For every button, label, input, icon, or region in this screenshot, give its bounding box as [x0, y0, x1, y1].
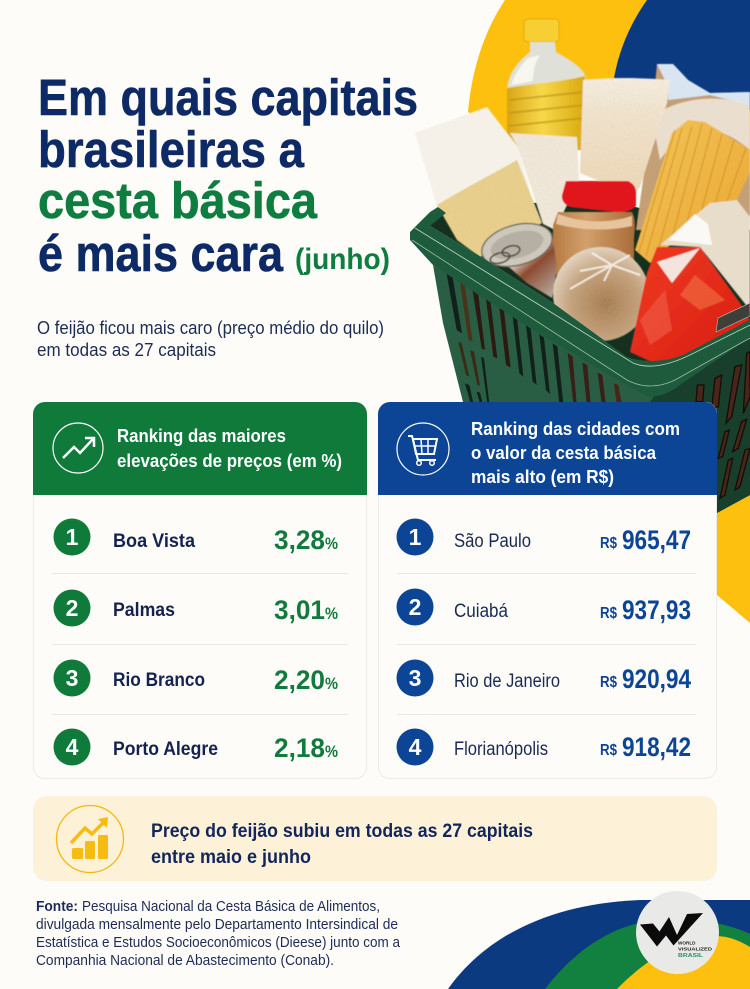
rank row: Rio de Janeiro: R$ — [600, 674, 617, 691]
jar with red lid — [553, 181, 636, 280]
logo: WORLD — [678, 940, 696, 946]
rank row: Rio Branco: Rio Branco — [113, 670, 205, 691]
rank row: Florianópolis: 918,42 — [622, 732, 691, 762]
rank row: Palmas — [54, 590, 338, 626]
rank row: Boa Vista — [54, 518, 338, 556]
oil bottle — [507, 19, 586, 150]
logo: VISUALIZED — [678, 947, 713, 953]
rank row: Rio de Janeiro — [396, 660, 691, 696]
rank row: Boa Vista: 3,28 — [274, 525, 325, 555]
rank row: Cuiabá: 937,93 — [622, 595, 691, 625]
can — [477, 216, 557, 298]
title — [38, 69, 418, 282]
rank row: Palmas: % — [325, 604, 338, 623]
rank row: Florianópolis: Florianópolis — [454, 739, 548, 760]
rank row: Porto Alegre: Porto Alegre — [113, 739, 218, 760]
rice bag center — [580, 78, 670, 195]
source note: Pesquisa Nacional da Cesta Básica de Alimentos, — [82, 899, 380, 915]
left panel heading: elevações de preços (em %) — [117, 450, 342, 471]
right panel heading: o valor da cesta básica — [471, 442, 657, 463]
basket rim — [410, 207, 750, 397]
rank row: São Paulo: São Paulo — [454, 531, 531, 552]
subtitle — [37, 317, 384, 360]
subtitle: O feijão ficou mais caro (preço médio do quilo) — [37, 317, 384, 338]
rank row: São Paulo: 1 — [409, 524, 422, 550]
right panel header — [378, 402, 717, 495]
right panel heading — [471, 418, 680, 487]
rank row: Porto Alegre — [54, 728, 338, 766]
rank row: Florianópolis: 4 — [409, 734, 422, 760]
source note: Estatística e Estudos Socioeconômicos (Dieese) junto com a — [36, 935, 401, 951]
callout text: entre maio e junho — [151, 847, 311, 868]
rank row: São Paulo: R$ — [600, 535, 617, 552]
decorative top-right arcs — [468, 0, 750, 150]
rank row: Boa Vista: % — [325, 534, 338, 553]
source note: divulgada mensalmente pelo Departamento Intersindical de — [36, 917, 398, 933]
left panel heading — [117, 425, 342, 471]
rice bag left — [415, 107, 542, 257]
right panel heading: Ranking das cidades com — [471, 418, 680, 439]
rank row: Cuiabá — [396, 588, 691, 626]
left panel header — [33, 402, 367, 495]
rank row: Florianópolis — [396, 728, 691, 766]
basket interior — [430, 200, 750, 375]
icon: rising trend — [53, 423, 103, 473]
title: Em quais capitais — [38, 69, 418, 126]
title: é mais cara — [38, 225, 284, 282]
logo — [636, 891, 719, 974]
source note: Fonte: — [36, 899, 78, 915]
title: cesta básica — [38, 172, 318, 229]
rank row: Rio de Janeiro: 920,94 — [622, 664, 691, 694]
rank row: Rio de Janeiro: Rio de Janeiro — [454, 671, 560, 692]
rank row: Palmas: 2 — [66, 595, 78, 621]
rank row: Boa Vista: Boa Vista — [113, 531, 195, 552]
callout text: Preço do feijão subiu em todas as 27 capitais — [151, 821, 533, 842]
rank row: Porto Alegre: 4 — [66, 734, 79, 760]
rank row: Florianópolis: R$ — [600, 742, 617, 759]
rank row: Porto Alegre: % — [325, 742, 338, 761]
title: (junho) — [295, 243, 390, 276]
basket slots right — [696, 352, 750, 498]
red bag — [630, 247, 750, 368]
icon: chart growing — [56, 806, 124, 872]
round grain bag — [553, 247, 649, 341]
rank row: Rio Branco: 2,20 — [274, 665, 325, 695]
rank row: Cuiabá: R$ — [600, 605, 617, 622]
rank row: Rio Branco — [54, 660, 338, 696]
left panel heading: Ranking das maiores — [117, 425, 286, 446]
panel: ranking of most expensive basket — [378, 402, 717, 778]
source note — [36, 899, 401, 969]
right face shade — [650, 335, 750, 513]
rank row: Rio Branco: % — [325, 674, 338, 693]
white plastic bag right — [660, 200, 750, 310]
spaghetti — [635, 120, 750, 263]
rank row: Palmas: 3,01 — [274, 595, 325, 625]
source note: Companhia Nacional de Abastecimento (Conab). — [36, 953, 334, 969]
rank row: São Paulo: 965,47 — [622, 525, 691, 555]
rank row: São Paulo — [396, 518, 691, 556]
title: brasileiras a — [38, 121, 305, 178]
logo: BRASIL — [678, 953, 704, 959]
icon: shopping cart — [397, 423, 449, 475]
rank row: Rio Branco: 3 — [66, 665, 78, 691]
basket clip — [716, 303, 750, 332]
rank row: Cuiabá: 2 — [409, 594, 421, 620]
callout — [33, 796, 717, 881]
panel: ranking of price increases — [33, 402, 367, 778]
decorative yellow arc at right edge — [700, 490, 750, 623]
rice bag behind — [510, 133, 579, 230]
plastic bag back right — [636, 64, 750, 230]
rank row: Palmas: Palmas — [113, 600, 175, 621]
right panel heading: mais alto (em R$) — [471, 466, 614, 487]
basket slots left — [447, 274, 622, 403]
rank row: Boa Vista: 1 — [66, 524, 79, 550]
subtitle: em todas as 27 capitais — [37, 339, 216, 360]
food items — [415, 19, 750, 368]
rank row: Rio de Janeiro: 3 — [409, 665, 421, 691]
rank row: Cuiabá: Cuiabá — [454, 601, 508, 622]
callout text — [151, 821, 533, 868]
rank row: Porto Alegre: 2,18 — [274, 733, 325, 763]
basket body — [410, 207, 750, 513]
decorative bottom-right arcs — [448, 900, 750, 989]
